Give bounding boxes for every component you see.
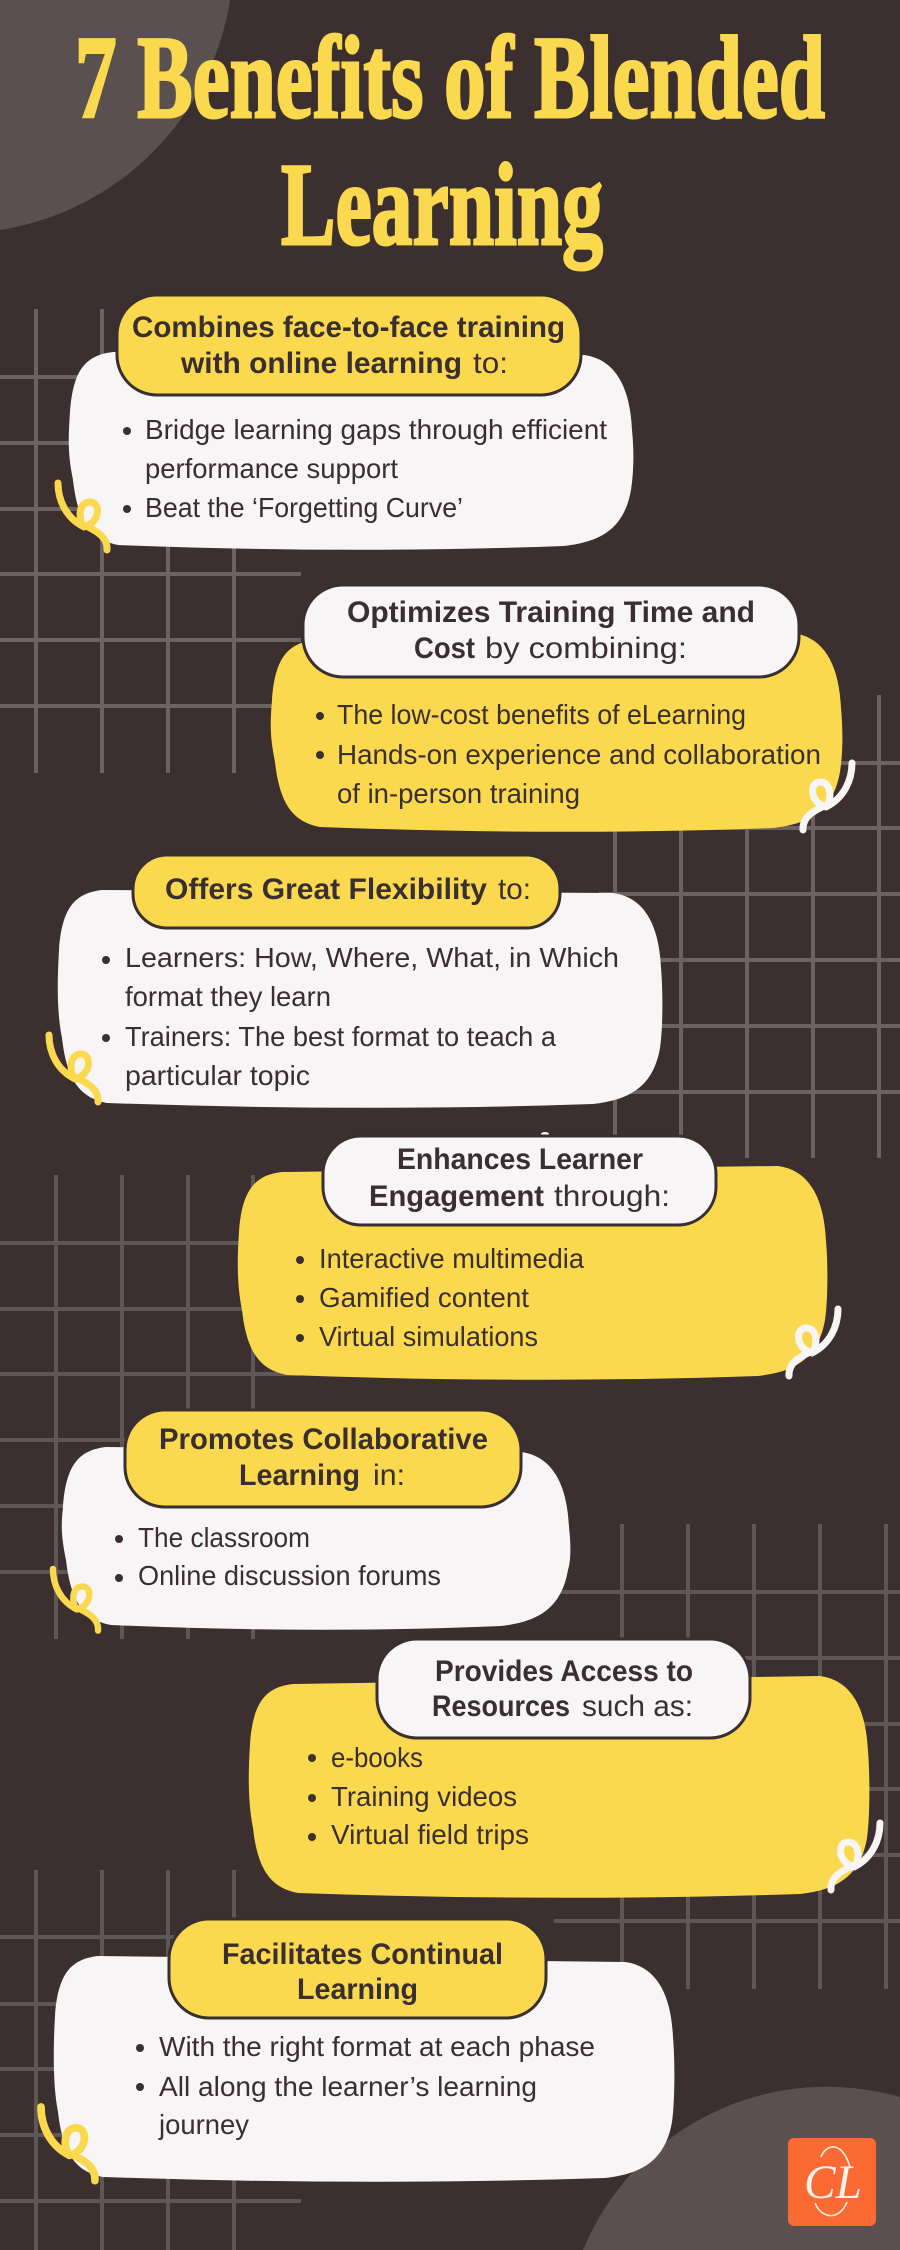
- card 2 heading: [303, 585, 799, 677]
- card 2 bullet list: of in-person training: [337, 778, 580, 809]
- card 4 bullet list: Gamified content: [319, 1282, 529, 1313]
- card 4 heading: through:: [554, 1180, 670, 1213]
- decorative circle: top left: [0, 0, 230, 230]
- icon: swirl 3: [49, 1035, 98, 1102]
- card 7 bullet list: [136, 2031, 595, 2140]
- icon: swirl 6: [831, 1823, 880, 1890]
- card 3 bullet list: Learners: How, Where, What, in Which: [125, 942, 619, 973]
- card 3 background: [58, 890, 662, 1108]
- decorative circle: bottom right: [583, 2087, 900, 2250]
- icon: swirl 4: [789, 1309, 838, 1376]
- card 7 heading: [169, 1919, 546, 2018]
- card 6 background: [249, 1676, 869, 1898]
- card 3 bullet list: [102, 942, 619, 1091]
- card 6 heading: [377, 1639, 750, 1738]
- card 1 bullet list: [123, 414, 607, 523]
- card 3 bullet list: Trainers: The best format to teach a: [125, 1021, 556, 1052]
- panel: benefit 3: [49, 855, 662, 1108]
- card 4 bullet list: Virtual simulations: [319, 1321, 538, 1352]
- card 7 bullet list: journey: [158, 2109, 249, 2140]
- card 6 bullet list: Training videos: [331, 1781, 517, 1812]
- panel: benefit 7: [41, 1919, 674, 2182]
- card 2 bullet list: [316, 699, 821, 809]
- card 5 bullet list: Online discussion forums: [138, 1560, 441, 1591]
- card 4 background: [238, 1166, 827, 1380]
- logo: CL: [788, 2138, 876, 2226]
- card 5 heading: in:: [373, 1459, 405, 1492]
- card 6 heading: such as:: [582, 1690, 693, 1723]
- icon: swirl 5: [53, 1569, 98, 1631]
- panel: benefit 4: [238, 1132, 838, 1380]
- icon: swirl 2: [803, 763, 852, 830]
- card 4 bullet list: Interactive multimedia: [319, 1243, 584, 1274]
- icon: swirl 7: [41, 2107, 95, 2181]
- title: Learning: [281, 139, 603, 270]
- card 4 bullet list: [296, 1243, 584, 1352]
- card 2 background: [271, 633, 842, 832]
- card 2 heading: Optimizes Training Time and: [347, 596, 755, 629]
- card 3 bullet list: format they learn: [125, 981, 331, 1012]
- card 1 background: [69, 352, 633, 550]
- card 6 heading: Resources: [432, 1690, 570, 1723]
- card 5 bullet list: The classroom: [138, 1522, 310, 1553]
- card 5 heading: Learning: [239, 1459, 360, 1492]
- card 7 bullet list: All along the learner’s learning: [159, 2071, 537, 2102]
- card 7 background: [54, 1956, 674, 2182]
- card 6 bullet list: Virtual field trips: [331, 1819, 529, 1850]
- card 5 heading: [125, 1410, 521, 1507]
- card 1 heading: [117, 295, 581, 395]
- logo: CL: CL: [804, 2156, 862, 2209]
- panel: benefit 1: [58, 295, 633, 550]
- card 1 bullet list: Beat the ‘Forgetting Curve’: [145, 492, 463, 523]
- icon: swirl 1: [58, 483, 107, 550]
- card 4 heading: Enhances Learner: [397, 1143, 643, 1176]
- card 5 heading: Promotes Collaborative: [159, 1423, 488, 1456]
- card 1 bullet list: performance support: [145, 453, 398, 484]
- card 4 heading: [323, 1132, 716, 1225]
- card 3 heading: to:: [498, 873, 531, 906]
- panel: benefit 6: [249, 1639, 880, 1898]
- card 6 heading: Provides Access to: [435, 1655, 693, 1688]
- card 4 heading: Engagement: [369, 1180, 544, 1213]
- panel: benefit 5: [53, 1410, 570, 1631]
- card 1 heading: Combines face-to-face training: [132, 311, 565, 344]
- card 2 heading: Cost: [414, 632, 475, 665]
- card 2 bullet list: The low-cost benefits of eLearning: [337, 699, 746, 730]
- card 6 bullet list: e-books: [331, 1742, 423, 1773]
- card 3 heading: Offers Great Flexibility: [165, 873, 487, 906]
- card 1 bullet list: Bridge learning gaps through efficient: [145, 414, 607, 445]
- card 7 bullet list: With the right format at each phase: [159, 2031, 595, 2062]
- card 5 bullet list: [115, 1522, 441, 1591]
- card 1 heading: to:: [473, 347, 508, 380]
- card 5 background: [62, 1447, 570, 1630]
- card 7 heading: Facilitates Continual: [222, 1938, 503, 1971]
- title: [75, 12, 825, 270]
- card 2 bullet list: Hands-on experience and collaboration: [337, 739, 821, 770]
- panel: benefit 2: [271, 585, 852, 832]
- card 2 heading: by combining:: [485, 632, 687, 665]
- card 7 heading: Learning: [297, 1973, 418, 2006]
- card 3 bullet list: particular topic: [125, 1060, 310, 1091]
- card 3 heading: [133, 855, 560, 928]
- card 1 heading: with online learning: [180, 347, 462, 380]
- card 6 bullet list: [308, 1742, 529, 1850]
